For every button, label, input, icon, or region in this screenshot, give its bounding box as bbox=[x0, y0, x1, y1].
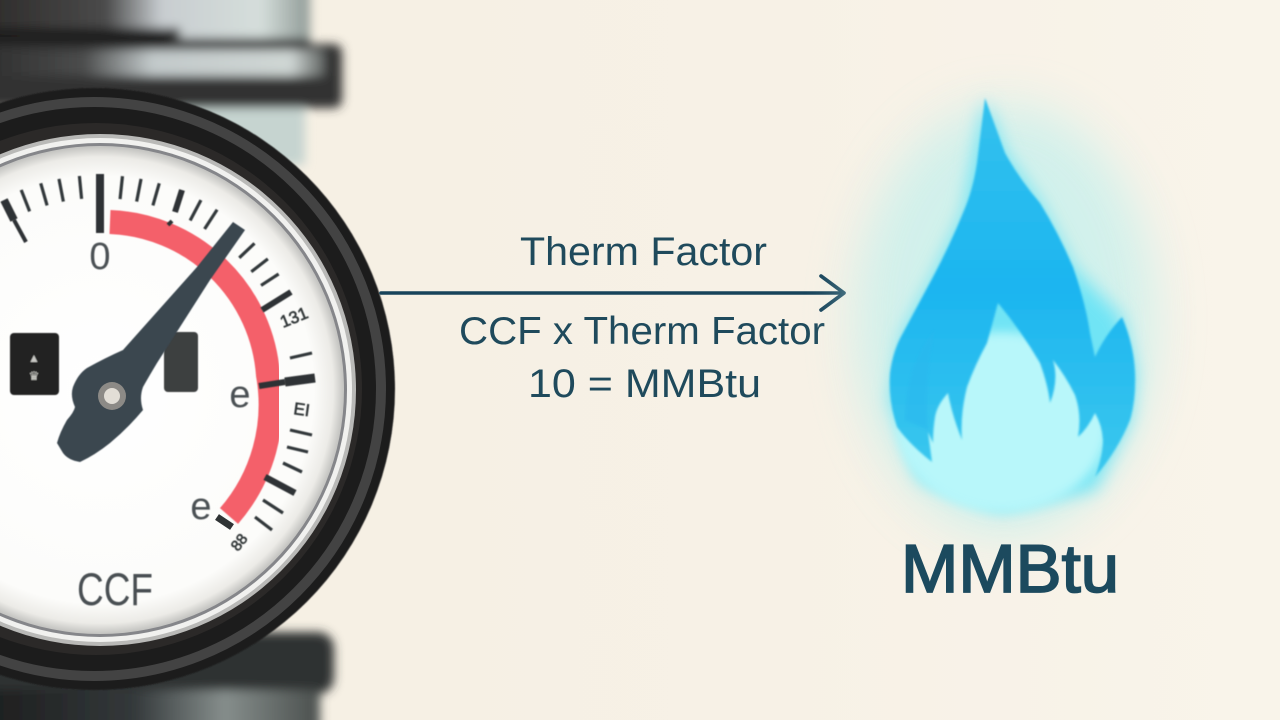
left black indicator window: ▲ bbox=[28, 351, 40, 365]
needle hub screw bbox=[98, 382, 126, 410]
small scale labels: 88 bbox=[228, 531, 251, 554]
dial numerals: 0 bbox=[89, 236, 111, 278]
dial numerals: e bbox=[229, 374, 251, 416]
gauge: outer black bezel bbox=[0, 88, 395, 690]
pipe: blurred bottom section bbox=[0, 632, 334, 720]
left black indicator window: ♛ bbox=[29, 369, 39, 383]
flame: pale inner droplet bbox=[896, 332, 1108, 512]
right dark indicator window bbox=[164, 332, 198, 392]
small scale labels bbox=[228, 303, 311, 554]
red zone end mark bbox=[217, 517, 232, 527]
pipe: blurred top section bbox=[0, 0, 342, 165]
dial numerals: e bbox=[190, 486, 212, 528]
dial major ticks bbox=[4, 174, 315, 493]
formula line 1: CCF x Therm Factor bbox=[459, 310, 825, 353]
label: MMBtu: MMBtu bbox=[901, 531, 1119, 607]
dial numerals bbox=[89, 236, 251, 528]
formula line 2: 10 = MMBtu bbox=[528, 362, 761, 406]
dial unit label: CCF: CCF bbox=[77, 564, 153, 615]
small scale labels: EI bbox=[292, 399, 311, 420]
left black indicator window bbox=[10, 333, 59, 395]
needle pointer bbox=[57, 222, 245, 462]
small scale labels: 131 bbox=[277, 303, 311, 332]
gauge: white dial face bbox=[0, 146, 344, 634]
icon: blue flame bbox=[855, 98, 1155, 535]
arrow bbox=[381, 276, 844, 310]
gauge bbox=[0, 88, 395, 690]
flame: soft outer glow bbox=[855, 105, 1155, 535]
red zone arc bbox=[110, 222, 271, 516]
gauge: chrome ring bbox=[0, 134, 356, 646]
flame: blue body bbox=[890, 98, 1135, 477]
dial tick marks bbox=[21, 176, 312, 530]
flame: darker fold bbox=[905, 330, 935, 430]
label: Therm Factor: Therm Factor bbox=[520, 230, 767, 274]
